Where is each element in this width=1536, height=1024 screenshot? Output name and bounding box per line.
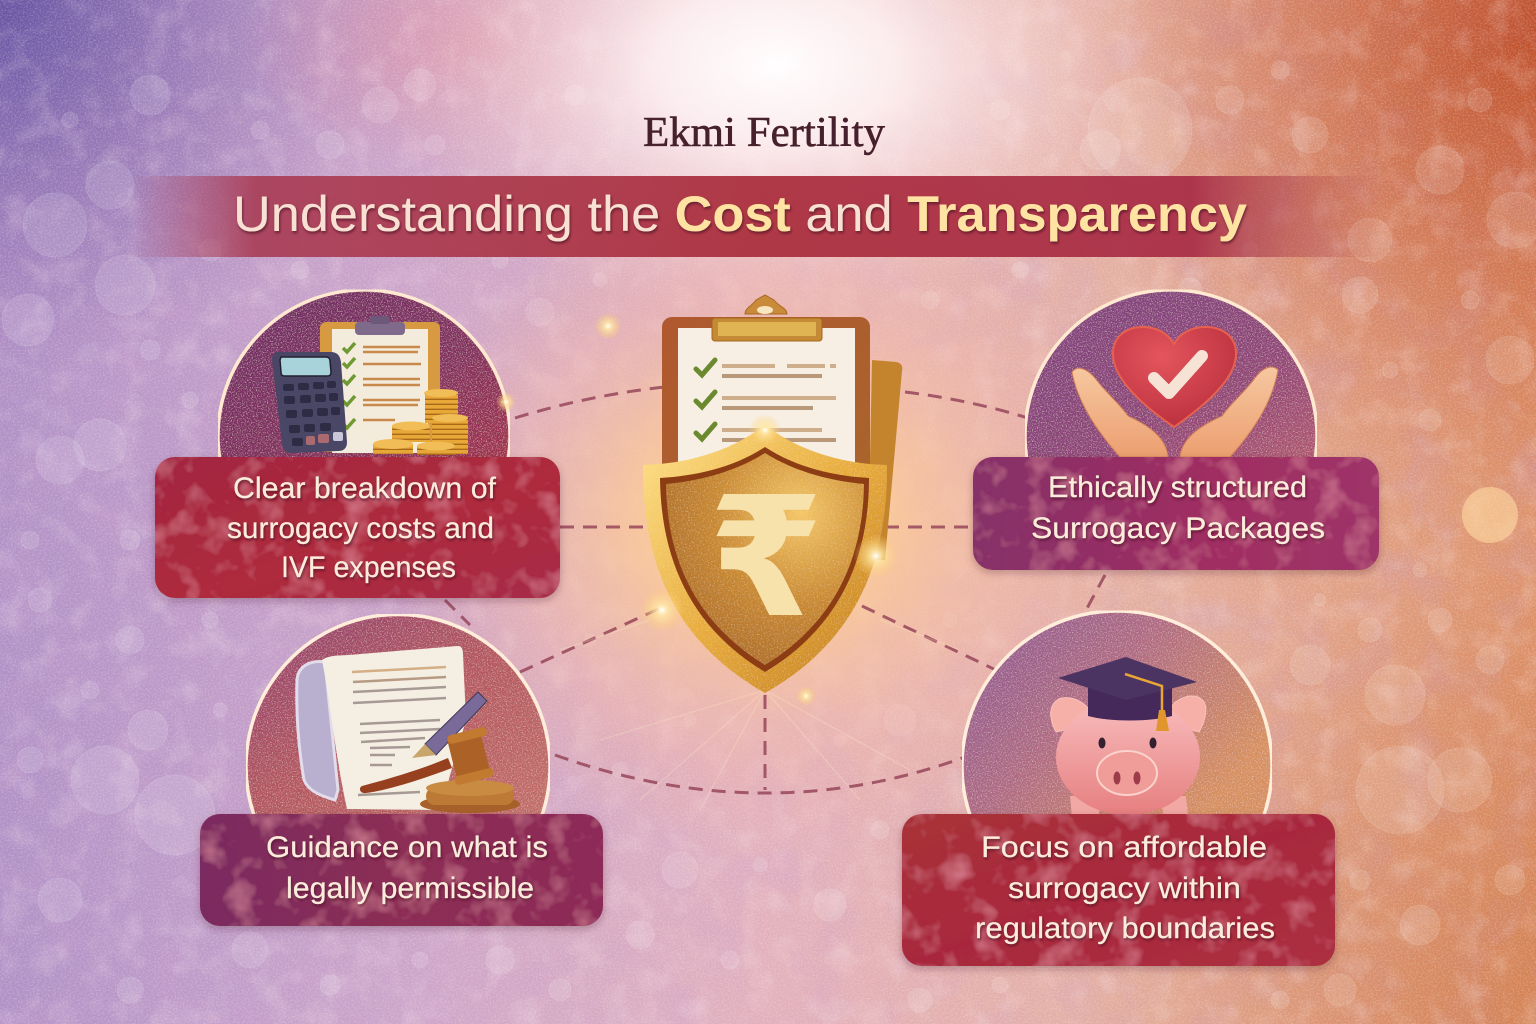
brand name: Ekmi Fertility bbox=[643, 110, 885, 156]
card: legal guidance bbox=[200, 814, 603, 926]
icon: caring hands bbox=[1072, 367, 1278, 457]
panel: affordable surrogacy bbox=[902, 611, 1335, 966]
panel: cost breakdown bbox=[155, 290, 560, 598]
icon: pen bbox=[412, 692, 487, 758]
icon: gavel bbox=[360, 726, 520, 813]
dome: affordable surrogacy bbox=[962, 611, 1272, 818]
label: affordable surrogacy: surrogacy within bbox=[1008, 872, 1241, 905]
icon: calculator bbox=[272, 352, 347, 453]
dome: cost breakdown bbox=[218, 290, 510, 460]
label: cost breakdown: IVF expenses bbox=[281, 551, 456, 584]
panel: legal guidance bbox=[200, 614, 603, 926]
title: Understanding the Cost and Transparency bbox=[233, 186, 1247, 242]
title banner bbox=[130, 176, 1380, 257]
icon: rupee shield bbox=[643, 425, 887, 693]
label: cost breakdown bbox=[227, 472, 497, 584]
icon: heart with check bbox=[1113, 327, 1236, 427]
label: ethical packages: Surrogacy Packages bbox=[1031, 512, 1325, 545]
label: affordable surrogacy: Focus on affordable bbox=[981, 831, 1267, 864]
icon: legal document bbox=[297, 646, 466, 810]
dome: ethical packages bbox=[1025, 290, 1317, 460]
label: cost breakdown: surrogacy costs and bbox=[227, 512, 494, 545]
label: cost breakdown: Clear breakdown of bbox=[233, 472, 497, 505]
label: ethical packages: Ethically structured bbox=[1048, 471, 1307, 504]
dome: legal guidance bbox=[246, 614, 550, 818]
card: affordable surrogacy bbox=[902, 814, 1335, 966]
label: legal guidance bbox=[266, 831, 548, 905]
sparkles bbox=[496, 312, 898, 706]
icon: coins bbox=[373, 389, 468, 455]
label: ethical packages bbox=[1031, 471, 1325, 545]
panel: ethical packages bbox=[973, 290, 1379, 570]
icon: clipboard bbox=[320, 316, 440, 453]
icon: graduation cap bbox=[1058, 657, 1197, 731]
card: ethical packages bbox=[973, 457, 1379, 570]
label: legal guidance: legally permissible bbox=[286, 872, 534, 905]
card: cost breakdown bbox=[155, 457, 560, 598]
label: affordable surrogacy bbox=[975, 831, 1275, 945]
dashed connectors bbox=[445, 387, 1105, 793]
label: affordable surrogacy: regulatory boundaries bbox=[975, 912, 1275, 945]
icon: clipboard bbox=[662, 295, 902, 560]
rupee symbol: ₹ bbox=[708, 462, 824, 655]
icon: piggy bank bbox=[1051, 696, 1206, 817]
label: legal guidance: Guidance on what is bbox=[266, 831, 548, 864]
central emblem bbox=[496, 295, 960, 810]
